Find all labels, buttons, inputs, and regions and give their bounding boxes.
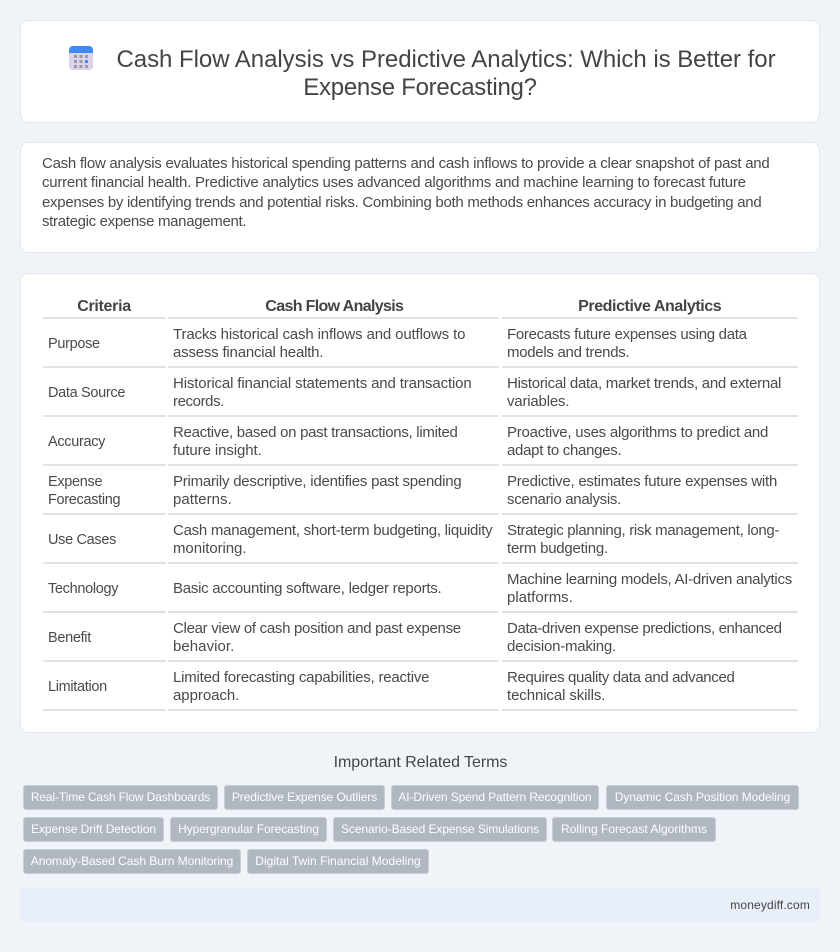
related terms heading: Important Related Terms — [334, 754, 507, 771]
row: Benefit: decision-making. — [507, 638, 616, 655]
tag — [170, 817, 327, 842]
tag: AI-Driven Spend Pattern Recognition — [398, 790, 592, 804]
row: Benefit — [48, 620, 782, 655]
tag — [23, 817, 164, 842]
tag — [23, 849, 241, 874]
title — [116, 46, 776, 101]
row: Use Cases: Strategic planning, risk management, long- — [507, 522, 779, 539]
tag — [333, 817, 547, 842]
row: Purpose — [48, 326, 747, 361]
row: Benefit: Data-driven expense predictions, enhanced — [507, 620, 782, 637]
comparison table panel — [20, 273, 820, 733]
row: Technology: Technology — [48, 581, 118, 597]
row: Data Source: Historical data, market trends, and external — [507, 375, 781, 392]
tag: Digital Twin Financial Modeling — [255, 854, 421, 868]
intro paragraph: Cash flow analysis evaluates historical spending patterns and cash inflows to provide a clear snapshot of past and — [42, 155, 769, 172]
table header — [77, 298, 721, 315]
row: Purpose: Purpose — [48, 336, 100, 352]
row: Limitation — [48, 669, 734, 704]
row: Use Cases: term budgeting. — [507, 540, 608, 557]
row: Purpose: Forecasts future expenses using data — [507, 326, 747, 343]
related terms tags — [23, 785, 799, 874]
row: Technology: Basic accounting software, ledger reports. — [173, 580, 441, 597]
intro paragraph: expenses by identifying trends and potential risks. Combining both methods enhances accuracy in budgeting and — [42, 194, 761, 211]
tag — [224, 785, 385, 810]
row: Benefit: behavior. — [173, 638, 234, 655]
row: Data Source: Data Source — [48, 385, 125, 401]
row: Purpose: Tracks historical cash inflows and outflows to — [173, 326, 465, 343]
icon: calendar — [69, 46, 93, 70]
row: Data Source — [48, 375, 781, 410]
row: Technology — [48, 571, 792, 606]
row: Benefit: Benefit — [48, 630, 91, 646]
row: Data Source: variables. — [507, 393, 569, 410]
row: Use Cases — [48, 522, 779, 557]
row: Data Source: Historical financial statements and transaction — [173, 375, 472, 392]
row: Purpose: models and trends. — [507, 344, 629, 361]
row: Limitation: approach. — [173, 687, 239, 704]
table header: Criteria — [77, 298, 131, 315]
row: Expense Forecasting: patterns. — [173, 491, 232, 508]
row: Use Cases: monitoring. — [173, 540, 246, 557]
row: Expense Forecasting: Primarily descriptive, identifies past spending — [173, 473, 462, 490]
row: Accuracy: Reactive, based on past transactions, limited — [173, 424, 458, 441]
row: Limitation: technical skills. — [507, 687, 605, 704]
table header: Predictive Analytics — [578, 298, 721, 315]
row: Use Cases: Cash management, short-term budgeting, liquidity — [173, 522, 492, 539]
tag: Rolling Forecast Algorithms — [561, 822, 707, 836]
table header: Cash Flow Analysis — [265, 298, 403, 315]
row: Benefit: Clear view of cash position and past expense — [173, 620, 461, 637]
row: Expense Forecasting: Forecasting — [48, 492, 120, 508]
tag: Real-Time Cash Flow Dashboards — [31, 790, 210, 804]
row: Accuracy — [48, 424, 768, 459]
row: Limitation: Limited forecasting capabilities, reactive — [173, 669, 429, 686]
tag — [247, 849, 429, 874]
row: Accuracy: Accuracy — [48, 434, 105, 450]
row: Technology: platforms. — [507, 589, 573, 606]
row: Accuracy: Proactive, uses algorithms to predict and — [507, 424, 768, 441]
tag: Scenario-Based Expense Simulations — [341, 822, 539, 836]
row: Accuracy: future insight. — [173, 442, 262, 459]
row: Expense Forecasting: Predictive, estimates future expenses with — [507, 473, 777, 490]
intro text panel — [20, 142, 820, 253]
tag: Expense Drift Detection — [31, 822, 156, 836]
tag: Predictive Expense Outliers — [232, 790, 377, 804]
row: Data Source: records. — [173, 393, 224, 410]
row: Expense Forecasting — [48, 473, 777, 508]
intro paragraph: strategic expense management. — [42, 213, 246, 230]
tag: Dynamic Cash Position Modeling — [615, 790, 790, 804]
tag — [23, 785, 218, 810]
footer bar — [20, 888, 820, 922]
tag — [391, 785, 599, 810]
tag: Hypergranular Forecasting — [178, 822, 319, 836]
intro paragraph: current financial health. Predictive analytics uses advanced algorithms and machine learning to forecast future — [42, 174, 746, 191]
row: Limitation: Limitation — [48, 679, 107, 695]
row: Expense Forecasting: scenario analysis. — [507, 491, 621, 508]
row: Limitation: Requires quality data and advanced — [507, 669, 734, 686]
intro paragraph — [42, 155, 769, 230]
tag — [552, 817, 716, 842]
header panel — [20, 20, 820, 123]
row: Technology: Machine learning models, AI-driven analytics — [507, 571, 792, 588]
row: Purpose: assess financial health. — [173, 344, 323, 361]
title: Expense Forecasting? — [303, 74, 537, 101]
row: Use Cases: Use Cases — [48, 532, 116, 548]
title: Cash Flow Analysis vs Predictive Analytics: Which is Better for — [116, 46, 776, 73]
row: Accuracy: adapt to changes. — [507, 442, 621, 459]
footer source text: moneydiff.com — [730, 898, 810, 912]
row: Expense Forecasting: Expense — [48, 474, 102, 490]
tag — [606, 785, 799, 810]
tag: Anomaly-Based Cash Burn Monitoring — [31, 854, 233, 868]
